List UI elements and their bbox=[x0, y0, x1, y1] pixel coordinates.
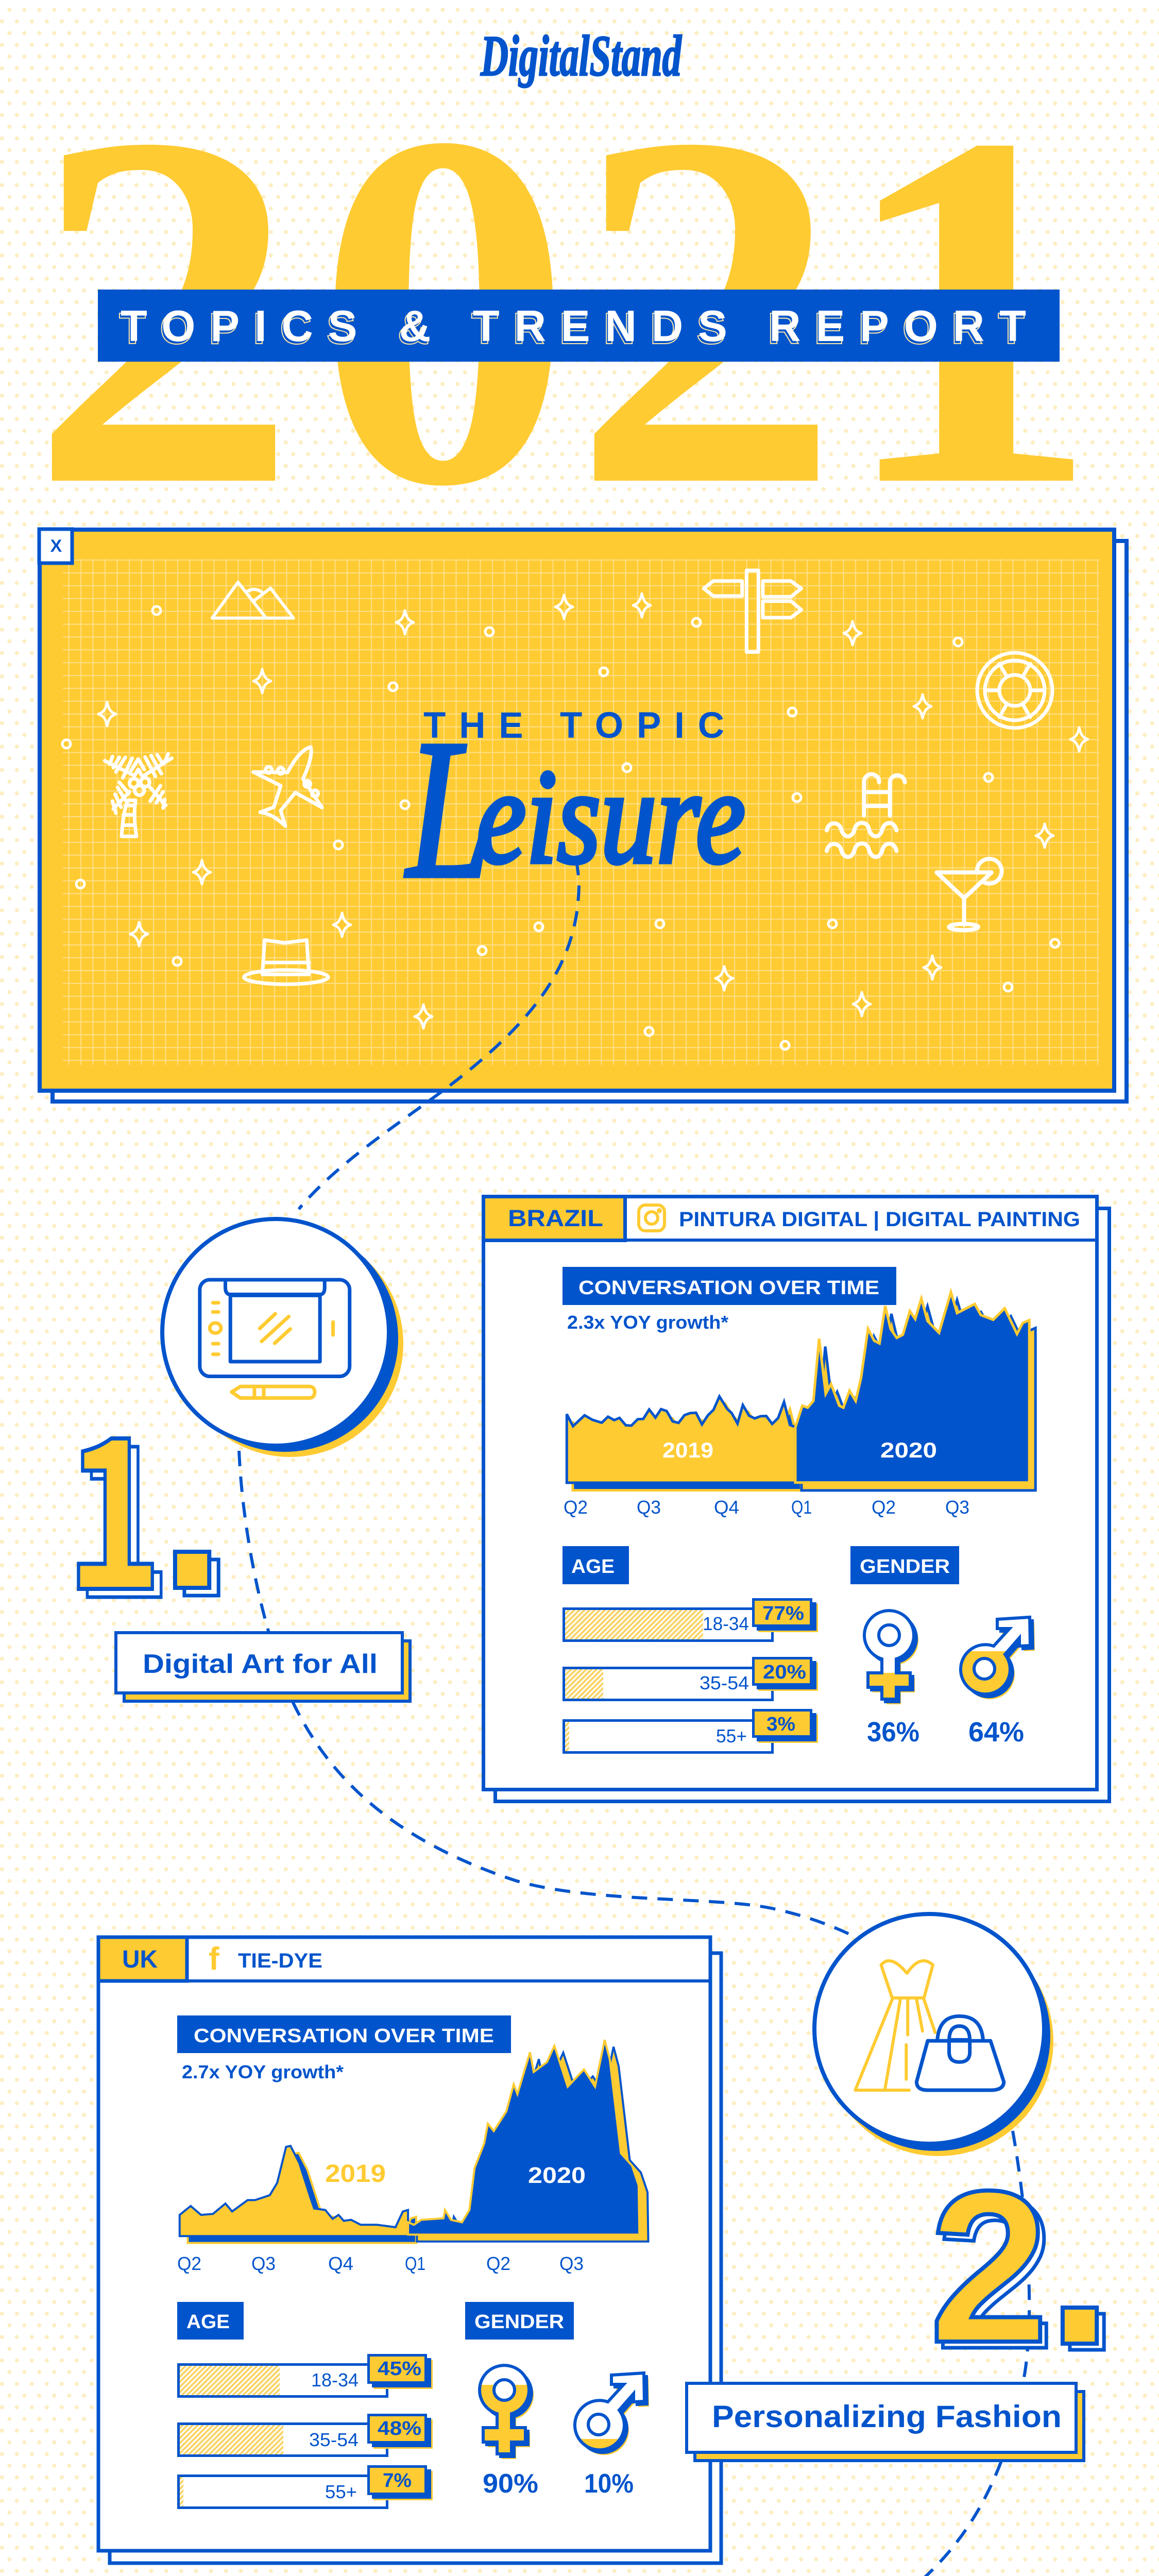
age bar 35-54: 35-54 bbox=[309, 2429, 359, 2450]
x axis labels bbox=[177, 2253, 584, 2274]
step 1 label: Digital Art for All bbox=[143, 1649, 378, 1679]
x axis labels: Q2 bbox=[486, 2253, 510, 2274]
gender percentages: 36% bbox=[867, 1717, 919, 1748]
heading: big 2021: 2 bbox=[572, 29, 841, 591]
x axis labels: Q4 bbox=[328, 2253, 353, 2274]
conversation heading bbox=[177, 2015, 511, 2053]
step 2 circle icon: dress and bag bbox=[814, 1914, 1053, 2156]
x axis labels: Q4 bbox=[714, 1497, 739, 1518]
area chart: uk bbox=[180, 2040, 648, 2243]
step 2 label: Personalizing Fashion bbox=[712, 2399, 1062, 2434]
age bar 55+: 55+ bbox=[325, 2481, 357, 2502]
panel: the topic leisure bbox=[39, 529, 1127, 1101]
step 1 number: 1 bbox=[74, 1355, 172, 1657]
age bar 35-54 bbox=[564, 1658, 818, 1700]
x axis labels: Q3 bbox=[559, 2253, 584, 2274]
step 1 number: . bbox=[159, 1369, 226, 1639]
growth note: 2.3x YOY growth* bbox=[567, 1312, 728, 1333]
heading: big 2021 bbox=[29, 29, 1100, 591]
gender heading bbox=[850, 1546, 959, 1584]
x axis labels: Q2 bbox=[564, 1497, 588, 1518]
gender percentages: 10% bbox=[584, 2469, 634, 2499]
age bar 18-34 bbox=[564, 1599, 818, 1640]
heading: leisure script: eisure bbox=[476, 742, 745, 891]
icon: female symbol bbox=[864, 1611, 918, 1704]
x axis labels: Q2 bbox=[177, 2253, 201, 2274]
conversation heading: CONVERSATION OVER TIME bbox=[578, 1277, 879, 1299]
age bar 55+ bbox=[178, 2467, 433, 2508]
topic title: PINTURA DIGITAL | DIGITAL PAINTING bbox=[679, 1208, 1080, 1231]
step 1 label bbox=[116, 1633, 410, 1701]
gender percentages bbox=[867, 1717, 1024, 1748]
gender heading: GENDER bbox=[474, 2311, 564, 2333]
panel front layer bbox=[40, 530, 1114, 1091]
age bar 55+: 7% bbox=[383, 2470, 412, 2492]
icon: male symbol bbox=[575, 2373, 649, 2455]
header: country tag bbox=[483, 1196, 625, 1241]
age bar 35-54 bbox=[178, 2415, 433, 2455]
step 2 number: 2 bbox=[935, 2153, 1055, 2394]
x axis labels: Q2 bbox=[872, 1497, 896, 1518]
step 1 number: . bbox=[168, 1377, 235, 1647]
area chart: brazil: 2020 bbox=[880, 1438, 937, 1462]
heading: big 2021: 2 bbox=[29, 29, 298, 591]
icon: life ring bbox=[977, 653, 1052, 728]
step 2 number: . bbox=[1046, 2125, 1114, 2395]
heading: the topic: THE TOPIC bbox=[423, 705, 724, 746]
header: country tag bbox=[98, 1937, 187, 1981]
icon: facebook: f bbox=[209, 1941, 219, 1977]
icon: instagram bbox=[639, 1205, 664, 1231]
step 2 number bbox=[929, 2125, 1121, 2401]
gender heading: GENDER bbox=[860, 1556, 950, 1578]
age bar 18-34 bbox=[178, 2355, 433, 2397]
age bar 35-54: 35-54 bbox=[700, 1672, 749, 1693]
x axis labels: Q3 bbox=[945, 1497, 969, 1518]
icon: female symbol bbox=[480, 2365, 534, 2459]
area chart: brazil: 2019 bbox=[662, 1438, 713, 1462]
logo: Digital Stand: DigitalStand bbox=[480, 24, 682, 88]
conversation heading: CONVERSATION OVER TIME bbox=[194, 2025, 494, 2047]
age bar 35-54: 20% bbox=[763, 1662, 806, 1683]
age heading bbox=[177, 2302, 244, 2340]
header: country tag: BRAZIL bbox=[508, 1205, 603, 1231]
age bar 18-34: 18-34 bbox=[703, 1613, 749, 1634]
x axis labels: Q1 bbox=[791, 1497, 812, 1518]
icon: palm tree bbox=[105, 754, 172, 836]
x axis labels bbox=[564, 1497, 969, 1518]
age heading: AGE bbox=[186, 2311, 230, 2333]
area chart: uk: 2020 bbox=[528, 2163, 586, 2188]
age heading bbox=[563, 1546, 629, 1584]
icon: plane bbox=[253, 747, 322, 826]
dashed connector: topic to step 1 bbox=[299, 860, 579, 1209]
banner: topics and trends report: TOPICS & TRENDS REPORT bbox=[119, 304, 1025, 353]
gender percentages: 64% bbox=[968, 1717, 1024, 1748]
dashed connector: step 2 to step 3 bbox=[318, 2131, 1029, 2576]
banner: topics and trends report: TOPICS & TRENDS REPORT bbox=[121, 302, 1026, 351]
age bar 55+: 55+ bbox=[716, 1725, 747, 1747]
x axis labels: Q1 bbox=[405, 2253, 425, 2274]
icon: male symbol bbox=[961, 1617, 1035, 1699]
dashed connector: step 1 to step 2 bbox=[239, 1451, 854, 1936]
heading: big 2021: 1 bbox=[838, 29, 1100, 591]
age heading: AGE bbox=[571, 1556, 615, 1578]
heading: leisure script: L bbox=[404, 700, 492, 919]
small circles bbox=[62, 606, 1059, 1049]
gender percentages: 90% bbox=[483, 2469, 538, 2499]
panel back layer bbox=[53, 541, 1127, 1101]
sparkle stars bbox=[98, 594, 1088, 1028]
banner: topics and trends report bbox=[98, 290, 1060, 362]
icon: sun hat bbox=[244, 940, 328, 984]
step 1 circle icon: drawing tablet bbox=[162, 1219, 403, 1457]
step 2 label bbox=[687, 2383, 1084, 2461]
area chart: uk: 2019 bbox=[325, 2160, 386, 2188]
header: country tag: UK bbox=[122, 1946, 158, 1973]
x axis labels: Q3 bbox=[637, 1497, 661, 1518]
age bar 18-34: 45% bbox=[378, 2358, 421, 2380]
icon: cocktail bbox=[936, 859, 1002, 930]
icon: swimming pool ladder bbox=[827, 774, 905, 857]
age bar 18-34: 77% bbox=[762, 1603, 804, 1624]
panel: uk bbox=[98, 1937, 721, 2563]
step 2 number: 2 bbox=[929, 2146, 1049, 2388]
heading: big 2021: 0 bbox=[315, 29, 573, 591]
heading: leisure script bbox=[404, 700, 745, 919]
close box bbox=[39, 529, 72, 563]
icon: mountains bbox=[212, 582, 294, 618]
conversation heading bbox=[563, 1267, 896, 1305]
step 2 number: . bbox=[1053, 2131, 1121, 2401]
x axis labels: Q3 bbox=[251, 2253, 276, 2274]
gender percentages bbox=[483, 2469, 634, 2499]
gender heading bbox=[465, 2302, 574, 2340]
age bar 35-54: 48% bbox=[378, 2418, 421, 2439]
age bar 18-34: 18-34 bbox=[311, 2369, 359, 2391]
growth note: 2.7x YOY growth* bbox=[182, 2061, 344, 2082]
age bar 55+ bbox=[564, 1710, 818, 1753]
icon: signpost bbox=[704, 570, 802, 652]
area chart: brazil bbox=[567, 1292, 1035, 1490]
topic title: TIE-DYE bbox=[238, 1950, 322, 1972]
step 1 number: 1 bbox=[65, 1347, 163, 1649]
panel: brazil bbox=[483, 1196, 1110, 1801]
close box: X bbox=[50, 536, 62, 556]
age bar 55+: 3% bbox=[766, 1714, 795, 1735]
